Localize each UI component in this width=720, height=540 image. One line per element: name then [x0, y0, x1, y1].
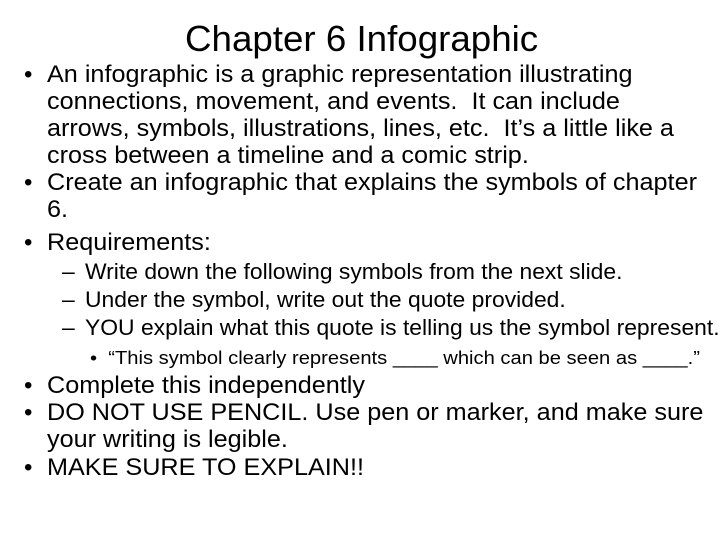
title: Chapter 6 Infographic [185, 18, 538, 59]
bullet: independently: • [24, 372, 32, 399]
bullet: requirements: • [24, 229, 32, 256]
bullet: task: 6. [47, 196, 68, 223]
bullet: definition: connections, movement, and events. It can include [47, 88, 620, 115]
bullet: definition [24, 61, 674, 169]
bullet: pen: your writing is legible. [47, 426, 288, 453]
bullet: definition: An infographic is a graphic representation illustrating [47, 61, 633, 88]
bullet: requirements: Requirements: [47, 229, 211, 256]
bullet: task: Create an infographic that explains the symbols of chapter [47, 169, 697, 196]
bullet: pen: • [24, 399, 32, 426]
bullet: pen [24, 399, 703, 453]
sub-bullets: Under the symbol, write out the quote provided. [85, 287, 566, 312]
quote template: • “This symbol clearly represents ____ which can be seen as ____.” [90, 348, 700, 368]
bullet: explain: MAKE SURE TO EXPLAIN!! [47, 454, 364, 481]
bullet: independently: Complete this independently [47, 372, 365, 399]
bullet: task: • [24, 169, 32, 196]
bullet: requirements [24, 229, 720, 368]
bullet: task [24, 169, 697, 223]
bullet: definition: arrows, symbols, illustrations, lines, etc. It’s a little like a [47, 115, 674, 142]
bullet: definition: cross between a timeline and a comic strip. [47, 142, 529, 169]
sub-bullets: – [62, 315, 75, 340]
bullet: pen: DO NOT USE PENCIL. Use pen or marker, and make sure [47, 399, 703, 426]
sub-bullets: – [62, 259, 75, 284]
sub-bullets [62, 259, 720, 368]
sub-bullets: Write down the following symbols from the next slide. [85, 259, 623, 284]
sub-bullets: – [62, 287, 75, 312]
bullet: explain: • [24, 454, 32, 481]
sub-bullets: YOU explain what this quote is telling us the symbol represent. [85, 315, 720, 340]
bullet: definition: • [24, 61, 32, 88]
